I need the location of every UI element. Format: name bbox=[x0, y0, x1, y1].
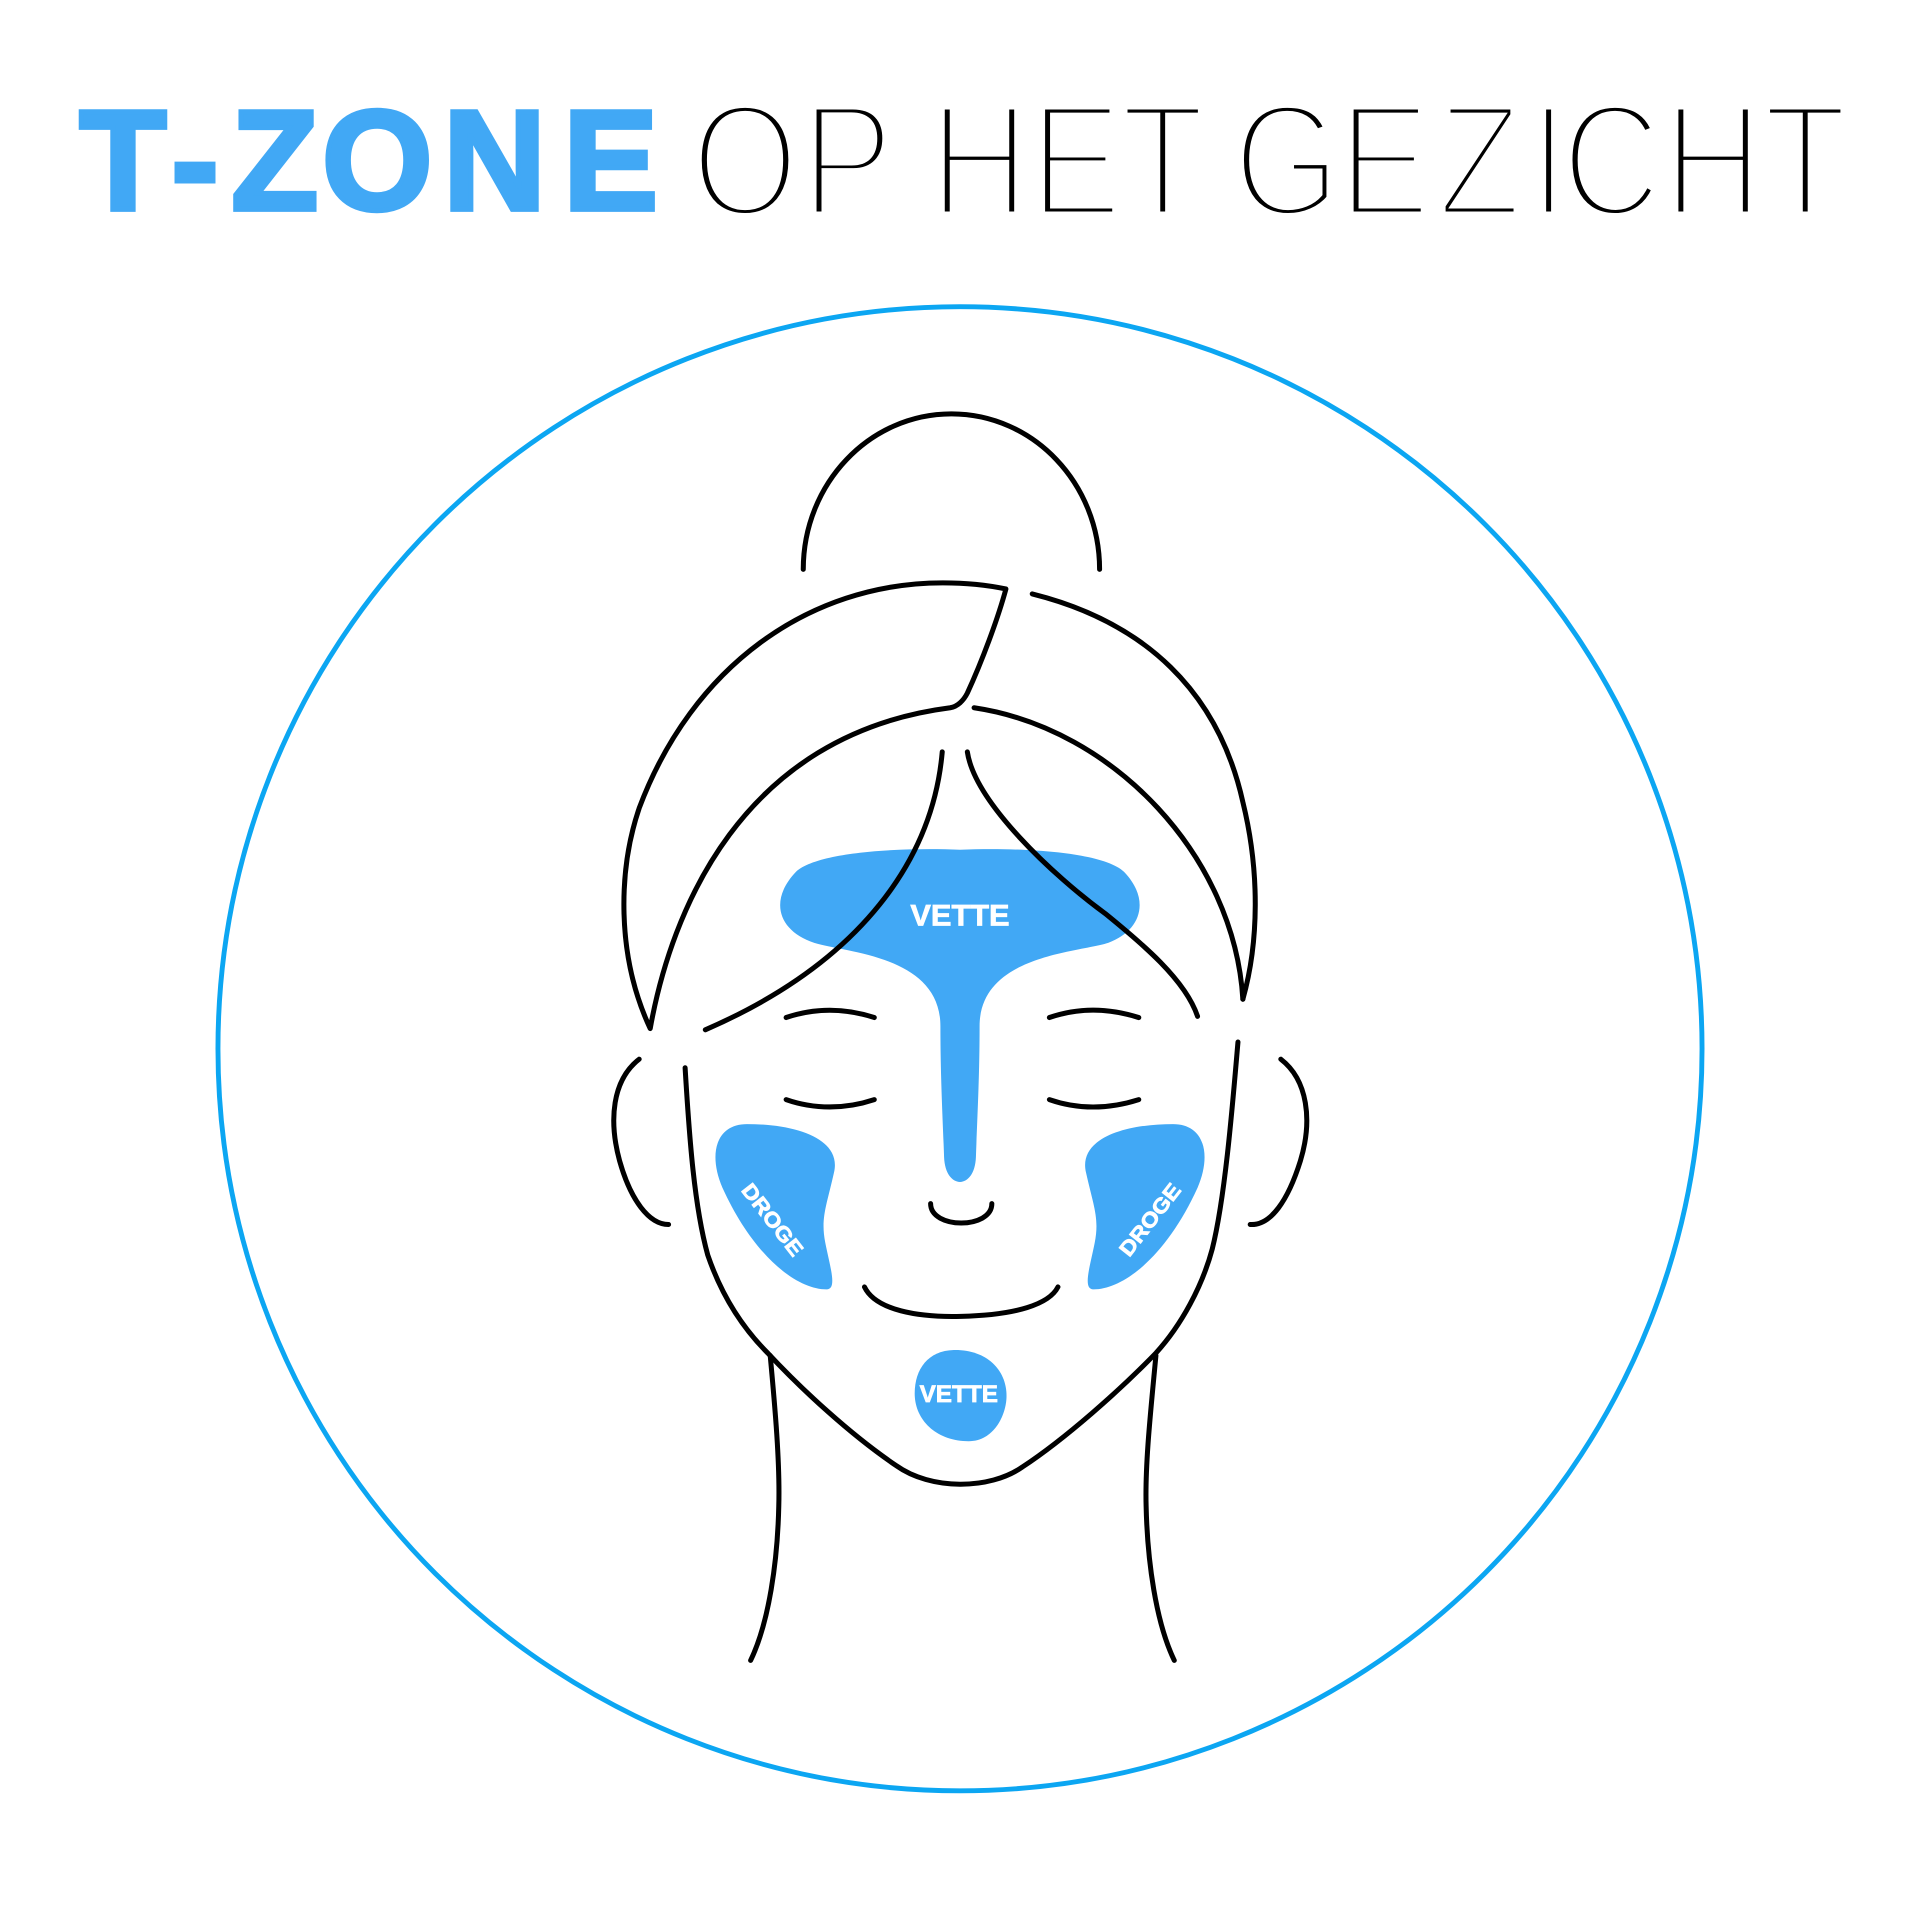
neck: right bbox=[1146, 1356, 1174, 1660]
title bbox=[80, 70, 1848, 250]
title: OP HET GEZICHT: OP HET GEZICHT bbox=[691, 70, 1848, 250]
label: left cheek DROGE: DROGE bbox=[737, 1179, 808, 1261]
title: T-ZONE: T-ZONE bbox=[80, 81, 658, 240]
mouth bbox=[864, 1287, 1058, 1316]
nose bbox=[931, 1204, 992, 1223]
hair bun bbox=[803, 414, 1100, 569]
zone labels bbox=[737, 900, 1186, 1408]
bangs: left bbox=[705, 752, 942, 1030]
blue circle frame bbox=[218, 307, 1702, 1791]
hair: right outer bbox=[1032, 594, 1255, 999]
hair: right inner bbox=[974, 708, 1243, 999]
label: right cheek DROGE: DROGE bbox=[1115, 1179, 1186, 1261]
zone: T-zone forehead and nose bbox=[780, 849, 1140, 1182]
eyebrow: right bbox=[1049, 1010, 1139, 1018]
face outline bbox=[685, 1042, 1238, 1484]
face line drawing bbox=[614, 414, 1307, 1660]
eye: right bbox=[1049, 1100, 1139, 1107]
zone: right cheek bbox=[1085, 1124, 1205, 1289]
ear: right bbox=[1250, 1059, 1307, 1225]
bangs: right bbox=[967, 752, 1198, 1016]
ear: left bbox=[614, 1059, 669, 1224]
eyebrow: left bbox=[786, 1010, 874, 1018]
label: chin VETTE: VETTE bbox=[920, 1381, 998, 1408]
hair: left section bbox=[624, 583, 1006, 1029]
eye: left bbox=[786, 1100, 874, 1107]
zone: left cheek bbox=[715, 1124, 835, 1289]
label: forehead VETTE: VETTE bbox=[910, 900, 1010, 933]
zone: chin bbox=[915, 1350, 1007, 1441]
oily and dry zones bbox=[715, 849, 1205, 1441]
neck: left bbox=[751, 1356, 779, 1660]
